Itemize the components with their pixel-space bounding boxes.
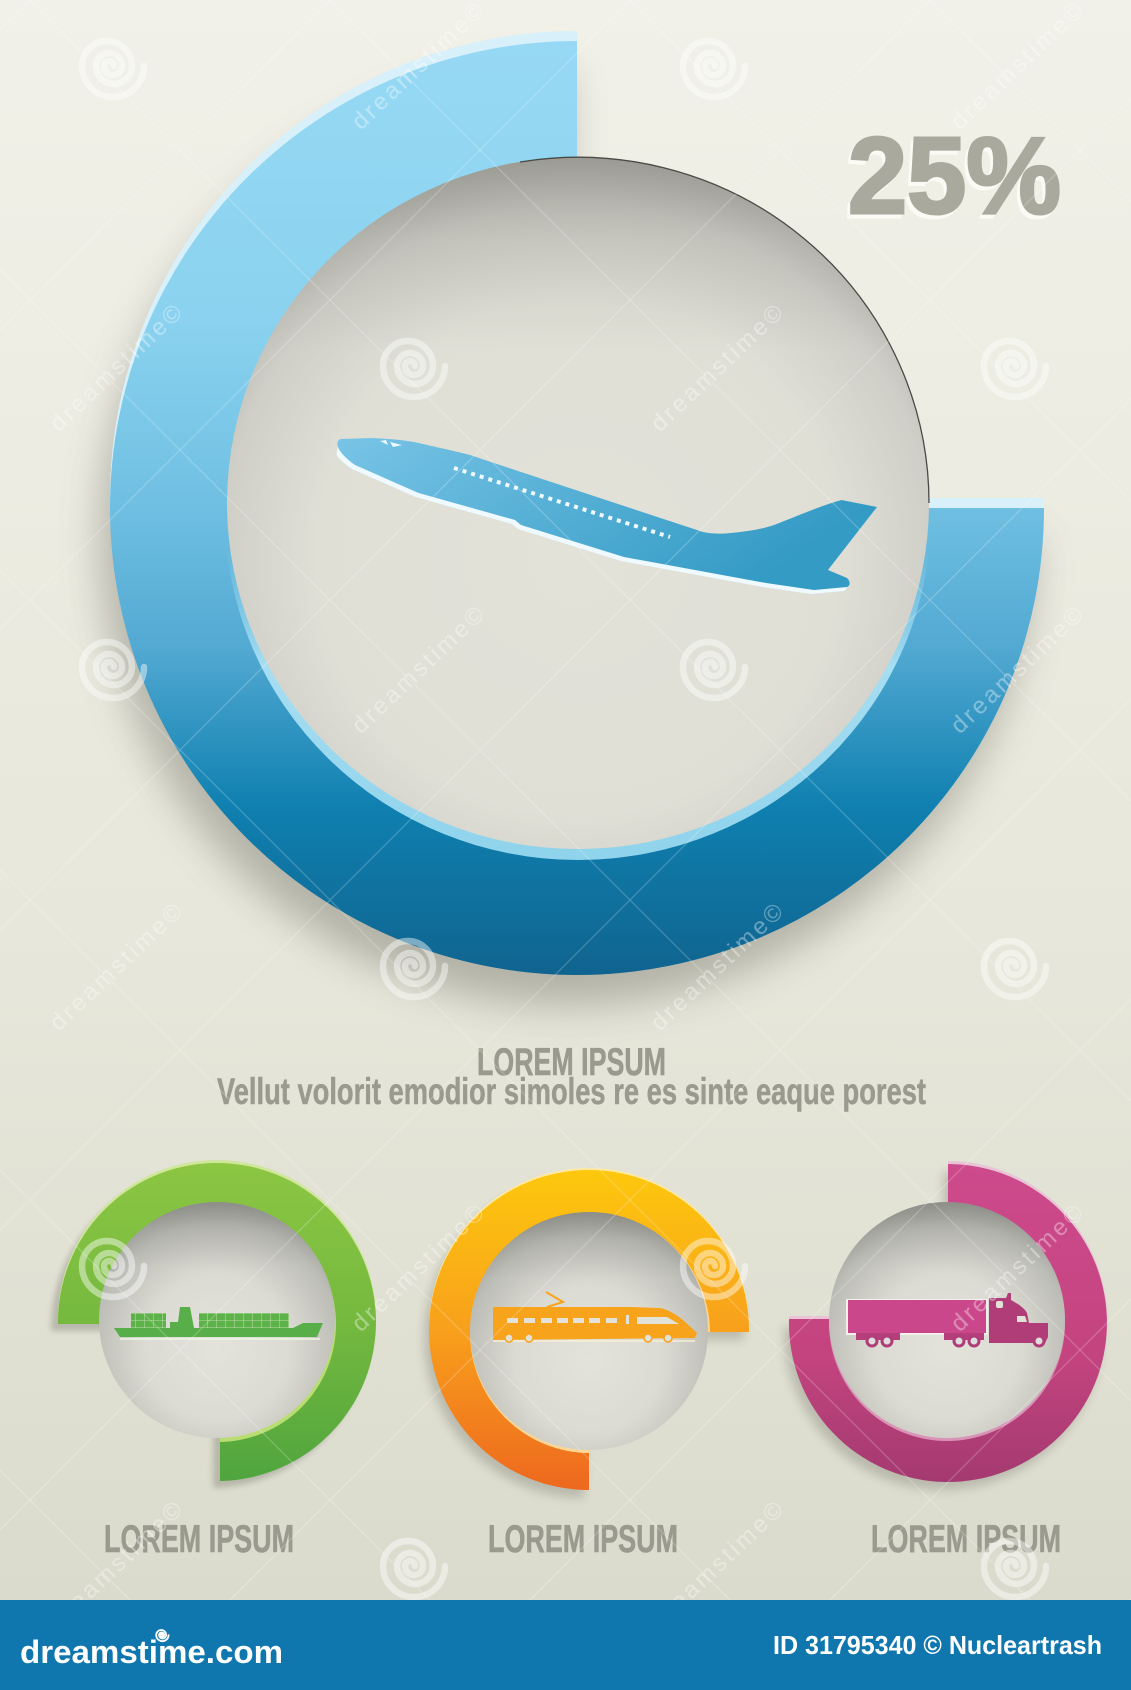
centre hole [227, 157, 929, 849]
label: rail: LOREM IPSUM [488, 1518, 678, 1561]
hole [99, 1202, 335, 1438]
ring shadow [784, 1172, 1102, 1490]
watermark overlay: dreamstime© [45, 1496, 188, 1634]
plane cockpit [380, 440, 402, 447]
green ring segment [58, 1163, 376, 1481]
percentage label: 25% [845, 119, 1058, 241]
footer credit: ID 31795340 © Nucleartrash [773, 1630, 1102, 1660]
ring inner highlight [229, 563, 927, 860]
watermark overlay: dreamstime© [45, 299, 188, 437]
panel: rail ring [424, 1168, 749, 1498]
ring shadow [51, 1170, 369, 1488]
ring highlight [470, 1213, 710, 1453]
footer logo: dreamstime.com [20, 1634, 283, 1670]
ring pale rim [110, 31, 1044, 965]
watermark overlay: dreamstime© [946, 601, 1089, 739]
hole top shading [829, 1202, 1065, 1438]
footer bar [0, 1600, 1131, 1690]
ring rim [789, 1161, 1107, 1479]
watermark overlay: dreamstime© [347, 1199, 490, 1337]
icon: container ship [114, 1307, 323, 1339]
ring highlight [829, 1316, 1065, 1441]
hole dark edge [520, 157, 929, 503]
orange ring segment [429, 1170, 749, 1490]
watermark overlay: dreamstime© [45, 898, 188, 1036]
icon: high speed train [493, 1292, 697, 1342]
ring highlight [220, 1290, 336, 1442]
hole top shading [470, 1212, 708, 1450]
ring drop shadow [100, 71, 1034, 1005]
label: shipping: LOREM IPSUM [104, 1518, 294, 1561]
panel: main air transport ring chart [100, 31, 1044, 1005]
hole top shading [227, 157, 929, 849]
icon: airplane [336, 438, 877, 594]
hole top shading [99, 1202, 335, 1438]
panel: road freight ring [784, 1161, 1107, 1490]
watermark overlay: dreamstime© [646, 1496, 789, 1634]
watermark overlay: dreamstime© [646, 898, 789, 1036]
watermark overlay: dreamstime© [946, 1199, 1089, 1337]
footer logo spiral [156, 1630, 169, 1641]
heading: lorem ipsum: LOREM IPSUM [477, 1041, 666, 1084]
plane windows [454, 468, 670, 537]
percentage label: 25% [848, 115, 1061, 237]
hole [829, 1202, 1065, 1438]
pink ring segment [789, 1164, 1107, 1482]
ring rim [429, 1168, 749, 1488]
panel: shipping ring [51, 1160, 376, 1488]
watermark overlay: dreamstime© [347, 601, 490, 739]
watermark overlay: dreamstime© [347, 0, 490, 135]
ring shadow [424, 1178, 744, 1498]
blue ring segment 75 percent [110, 41, 1044, 975]
ring rim [58, 1160, 376, 1478]
watermark overlay: dreamstime© [646, 299, 789, 437]
hole [470, 1212, 708, 1450]
icon: truck [846, 1293, 1048, 1346]
watermark overlay: dreamstime© [946, 0, 1089, 135]
